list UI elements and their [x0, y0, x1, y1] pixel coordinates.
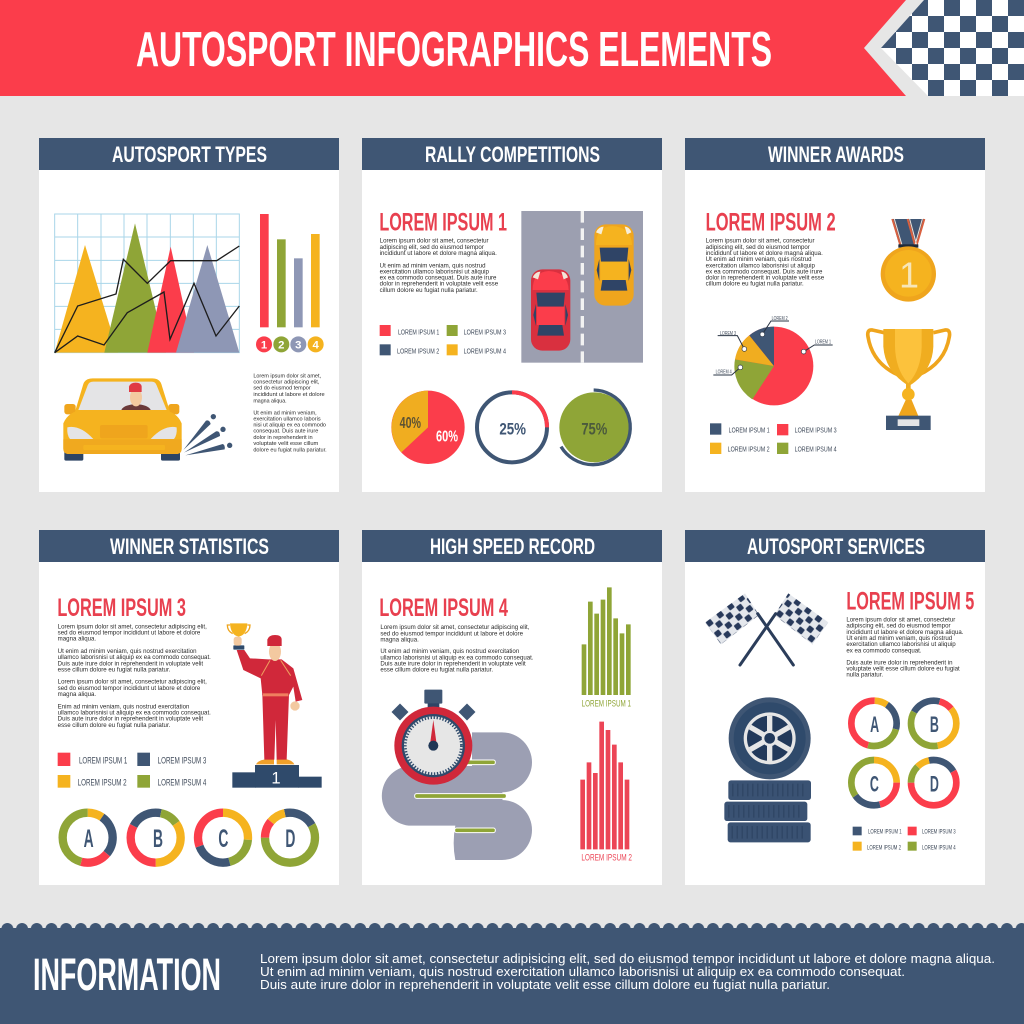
- panel content: rally competitions: [379, 209, 643, 465]
- ring chart 25 percent: [477, 392, 547, 462]
- heading: winner statistics: WINNER STATISTICS: [110, 534, 269, 559]
- heading: autosport services: AUTOSPORT SERVICES: [747, 534, 925, 559]
- donut chart C: [851, 760, 897, 805]
- pie chart with callouts: LOREM 3: [720, 331, 736, 337]
- donut chart C: C: [870, 771, 879, 796]
- heading: high speed record: HIGH SPEED RECORD: [430, 534, 595, 559]
- text block: magna aliqua.: [58, 691, 96, 698]
- text block: adipiscing elit, sed do eiusmod tempor: [846, 623, 951, 630]
- donut chart A: [63, 813, 113, 863]
- text block: voluptate velit esse cillum dolore eu fugiat: [846, 665, 960, 672]
- text block: dolor in reprehenderit in: [253, 435, 313, 441]
- panel content: autosport types: [55, 214, 327, 461]
- legend: LOREM IPSUM 4: [922, 844, 956, 851]
- text block: Lorem ipsum dolor sit amet, consectetur adipiscing elit,: [58, 679, 207, 686]
- text block: Duis aute irure dolor in reprehenderit in: [846, 659, 953, 666]
- text block: cillum dolore eu fugiat nulla pariatur.: [380, 287, 478, 294]
- text block: Ut enim ad minim veniam, quis nostrud: [706, 256, 812, 263]
- text block: magna aliqua.: [58, 636, 96, 643]
- bar chart: green: [582, 587, 631, 709]
- text block: Lorem ipsum dolor sit amet, consectetur adipiscing elit,: [58, 623, 207, 630]
- text block: esse cillum dolore eu fugiat nulla pariatur.: [58, 722, 171, 729]
- text block: Ut enim ad minim veniam, quis nostrud: [846, 635, 953, 642]
- legend: [380, 325, 507, 355]
- pie chart 60/40: 60%: [436, 429, 458, 446]
- text block: dolor in reprehenderit in voluptate velit esse: [706, 275, 825, 282]
- text block: ex ea commodo consequat. Duis aute irure: [380, 275, 497, 282]
- pie chart 60/40: [391, 391, 465, 464]
- text block: exercitation ullamco laborisnisi ut aliquip: [706, 262, 816, 269]
- panel: winner statistics: [39, 530, 339, 885]
- legend: LOREM IPSUM 1: [398, 327, 439, 336]
- ring chart 25 percent: 25%: [499, 420, 526, 439]
- road with two cars: [521, 211, 643, 363]
- legend: LOREM IPSUM 2: [397, 346, 439, 355]
- panel: autosport types: [39, 138, 339, 492]
- legend: LOREM IPSUM 2: [78, 777, 127, 787]
- bar chart with numbered legend: [256, 214, 324, 352]
- donut chart B: B: [930, 712, 939, 737]
- legend: LOREM IPSUM 2: [867, 844, 901, 851]
- subheading: LOREM IPSUM 3: [57, 594, 186, 622]
- icon: trophy: [868, 329, 950, 430]
- text block: sed do eiusmod tempor incididunt ut labore et dolore: [58, 685, 201, 692]
- text block: Ut enim ad minim veniam, quis nostrud exercitation: [58, 648, 197, 655]
- text block: cillum dolore eu fugiat nulla pariatur.: [706, 281, 804, 288]
- legend: LOREM IPSUM 4: [795, 445, 837, 454]
- text block: exercitation ullamco laborisnisi ut aliquip: [846, 641, 956, 648]
- text block: adipiscing elit, sed do eiusmod tempor: [380, 244, 484, 251]
- text block: sed do eiusmod tempor incididunt ut labore et dolore: [58, 630, 201, 637]
- donut chart A: A: [84, 826, 94, 853]
- text block: Ut enim ad minim veniam,: [253, 410, 317, 416]
- text block: magna aliqua.: [253, 398, 287, 404]
- icon: medal: 1: [899, 256, 919, 296]
- donut chart D: D: [930, 771, 939, 796]
- panel content: winner awards: [706, 209, 950, 454]
- checkered flag corner: [870, 0, 1024, 96]
- icon: stopwatch: [392, 690, 475, 785]
- pie chart with callouts: [713, 316, 833, 405]
- panel content: high speed record: [379, 587, 632, 862]
- heading: autosport types: AUTOSPORT TYPES: [112, 142, 267, 167]
- panel: rally competitions: [362, 138, 662, 492]
- donut chart A: [851, 701, 897, 746]
- icon: yellow car: [594, 224, 634, 306]
- legend: LOREM IPSUM 4: [158, 777, 206, 787]
- footer band: [0, 922, 1024, 1024]
- bar chart: green: LOREM IPSUM 1: [582, 699, 631, 709]
- icon: red car: [531, 269, 570, 351]
- legend: LOREM IPSUM 1: [79, 755, 127, 765]
- icon: crossed checkered flags: [705, 593, 828, 665]
- text block: voluptate velit esse cillum: [253, 441, 319, 447]
- donut chart D: D: [285, 826, 295, 853]
- panel: high speed record: [362, 530, 662, 885]
- bar chart: red: LOREM IPSUM 2: [581, 852, 632, 862]
- donut chart D: [911, 760, 956, 805]
- bar chart with numbered legend: 1: [261, 340, 267, 352]
- text block: adipiscing elit, sed do eiusmod tempor: [706, 244, 810, 251]
- bar chart: red: [580, 722, 632, 862]
- text block: Duis aute irure dolor in reprehenderit in voluptate velit: [58, 660, 203, 667]
- text block: Ut enim ad minim veniam, quis nostrud exercitation: [380, 648, 520, 655]
- subheading: LOREM IPSUM 4: [379, 594, 508, 622]
- text block: Duis aute irure dolor in reprehenderit in voluptate velit: [58, 716, 203, 723]
- text block: nulla pariatur.: [846, 672, 883, 679]
- donut chart C: C: [218, 826, 228, 853]
- icon: winner on podium: 1: [271, 769, 281, 788]
- text block: ullamco laborisnisi ut aliquip ex ea commodo consequat.: [58, 709, 211, 716]
- donut chart C: [198, 813, 248, 863]
- legend: [58, 753, 206, 788]
- donut chart A: A: [870, 712, 879, 737]
- legend: LOREM IPSUM 3: [464, 327, 506, 336]
- text block: Duis aute irure dolor in reprehenderit in voluptate velit: [380, 660, 526, 667]
- text block: Lorem ipsum dolor sit amet,: [253, 374, 321, 380]
- footer text: Ut enim ad minim veniam, quis nostrud exercitation ullamco laborisnisi ut aliquip ex ea commodo consequat.: [260, 964, 905, 979]
- subheading: LOREM IPSUM 1: [379, 209, 507, 237]
- text block: ullamco laborisnisi ut aliquip ex ea commodo consequat.: [58, 654, 211, 661]
- text block: dolor in reprehenderit in voluptate velit esse: [380, 281, 499, 288]
- icon: medal: [881, 219, 936, 302]
- bar chart with numbered legend: 4: [313, 340, 320, 352]
- donut chart B: B: [153, 826, 163, 853]
- pie chart with callouts: LOREM 4: [716, 370, 732, 376]
- legend: [853, 827, 956, 851]
- panel: winner awards: [685, 138, 985, 492]
- text block: Enim ad minim veniam, quis nostrud exercitation: [58, 703, 190, 710]
- footer heading: INFORMATION: [33, 949, 221, 1000]
- pie chart with callouts: LOREM 2: [772, 316, 788, 322]
- text block: Ut enim ad minim veniam, quis nostrud: [380, 262, 486, 269]
- text block: Lorem ipsum dolor sit amet, consectetur adipiscing elit,: [380, 624, 530, 631]
- text block: sed do eiusmod tempor: [253, 386, 311, 392]
- text block: consequat. Duis aute irure: [253, 429, 318, 435]
- heading: winner awards: WINNER AWARDS: [768, 142, 904, 167]
- text block: dolore eu fugiat nulla pariatur.: [253, 447, 327, 453]
- panel: autosport services: [685, 530, 985, 885]
- ring chart 75 percent: [559, 390, 630, 465]
- text block: incididunt ut labore et dolore magna aliqua.: [706, 250, 823, 257]
- header banner: [0, 0, 1024, 96]
- legend: LOREM IPSUM 2: [728, 445, 770, 454]
- donut chart D: [265, 813, 315, 863]
- icon: exhaust puffs: [183, 414, 232, 455]
- text block: magna aliqua.: [380, 637, 419, 644]
- text block: ex ea commodo consequat.: [846, 647, 922, 654]
- legend: [710, 423, 837, 454]
- bar chart with numbered legend: 3: [295, 340, 301, 352]
- text block: incididunt ut labore et dolore magna aliqua.: [380, 250, 497, 257]
- text block: esse cillum dolore eu fugiat nulla pariatur.: [380, 667, 493, 674]
- text block: esse cillum dolore eu fugiat nulla pariatur.: [58, 667, 171, 674]
- text block: incididunt ut labore et dolore: [253, 392, 325, 398]
- text block: nisi ut aliquip ex ea commodo: [253, 423, 326, 429]
- bar chart with numbered legend: 2: [278, 340, 284, 352]
- panel content: autosport services: [705, 587, 974, 851]
- footer text: Lorem ipsum dolor sit amet, consectetur adipisicing elit, sed do eiusmod tempor incididunt ut labore et dolore magna aliqua.: [260, 951, 995, 966]
- text block: ullamco laborisnisi ut aliquip ex ea commodo consequat.: [380, 654, 534, 661]
- pie chart 60/40: 40%: [400, 415, 421, 432]
- heading: rally competitions: RALLY COMPETITIONS: [425, 142, 600, 167]
- text block: ex ea commodo consequat. Duis aute irure: [706, 268, 823, 275]
- subheading: LOREM IPSUM 2: [706, 209, 836, 237]
- text block: Lorem ipsum dolor sit amet, consectetur: [846, 616, 955, 623]
- winding road: [382, 732, 532, 860]
- text block: sed do eiusmod tempor incididunt ut labore et dolore: [380, 630, 524, 637]
- text block: consectetur adipiscing elit,: [253, 380, 320, 386]
- footer text: Duis aute irure dolor in reprehenderit in voluptate velit esse cillum dolore eu fugiat nulla pariatur.: [260, 977, 830, 992]
- legend: LOREM IPSUM 3: [158, 755, 206, 765]
- panel content: winner statistics: [57, 594, 322, 863]
- text block: exercitation ullamco laboris: [253, 416, 321, 422]
- area and line chart: [55, 214, 239, 353]
- text block: Lorem ipsum dolor sit amet, consectetur: [706, 238, 815, 245]
- donut chart B: [911, 701, 956, 746]
- donut chart B: [131, 813, 181, 863]
- legend: LOREM IPSUM 1: [729, 425, 770, 434]
- ring chart 75 percent: 75%: [581, 420, 607, 439]
- legend: LOREM IPSUM 3: [795, 425, 837, 434]
- legend: LOREM IPSUM 1: [868, 829, 902, 836]
- icon: winner on podium: [227, 623, 322, 788]
- icon: wheel on tire stack: [724, 697, 811, 842]
- text block: incididunt ut labore et dolore magna aliqua.: [846, 629, 964, 636]
- legend: LOREM IPSUM 4: [464, 346, 507, 355]
- text block: exercitation ullamco laborisnisi ut aliquip: [380, 268, 490, 275]
- pie chart with callouts: LOREM 1: [815, 340, 831, 346]
- icon: yellow car with driver: [63, 378, 182, 461]
- legend: LOREM IPSUM 3: [922, 829, 956, 836]
- text block: Lorem ipsum dolor sit amet, consectetur: [380, 238, 489, 245]
